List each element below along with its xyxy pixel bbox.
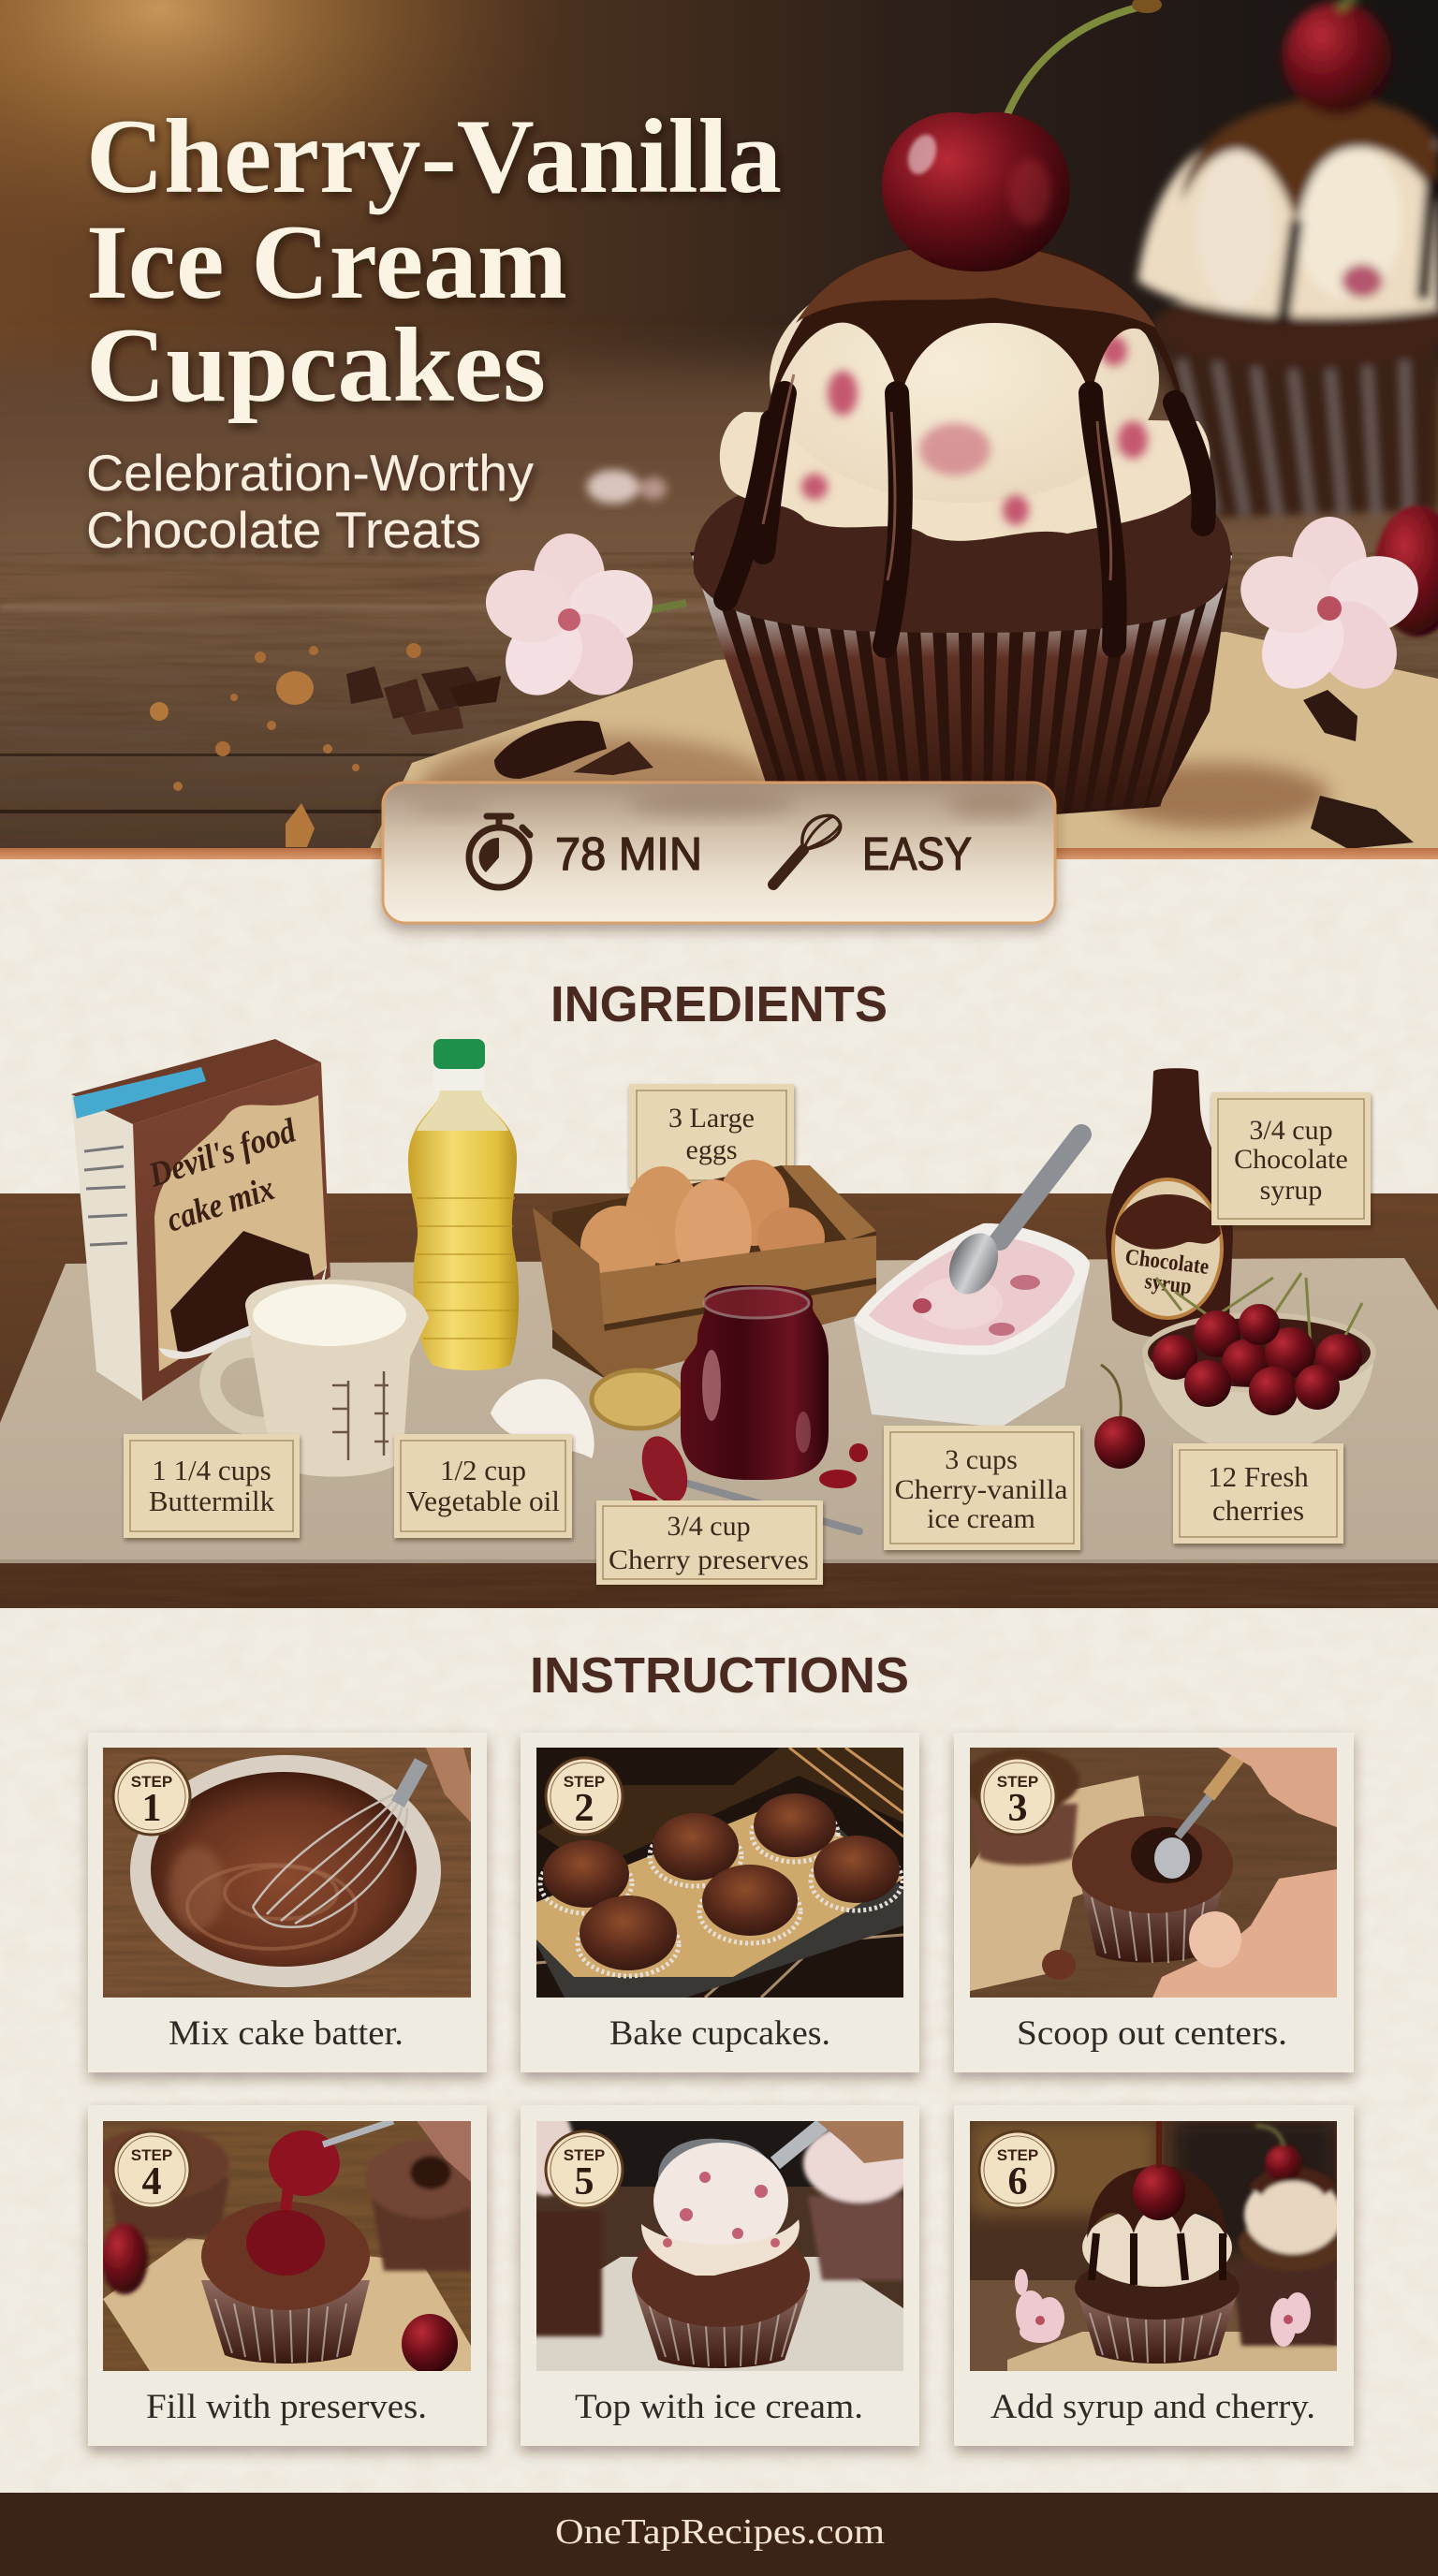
cherry preserves tag [596,1500,823,1585]
hero subtitle: Chocolate Treats [86,501,481,559]
parchment sheet [370,632,1438,849]
icon: stopwatch [469,816,530,887]
step 4 caption: Fill with preserves. [146,2388,427,2426]
hero title [86,98,782,424]
blossom left [477,534,686,710]
card paper [88,2105,487,2446]
ice cream tag: 3 cups [945,1444,1018,1475]
step 6 badge: STEP [997,2146,1038,2164]
chocolate syrup bottle: Chocolate [1123,1245,1211,1280]
hero title: Ice Cream [86,204,567,321]
step 2 badge [546,1758,623,1835]
card paper [954,2105,1354,2446]
chocolate syrup tag: syrup [1260,1175,1322,1206]
chocolate syrup bottle: syrup [1143,1269,1193,1299]
photo: topping with ice cream [536,2121,903,2371]
step 1 caption: Mix cake batter. [169,2014,404,2053]
bowl of cherries [1143,1273,1374,1454]
step 5 badge: STEP [564,2146,605,2164]
step 5 caption: Top with ice cream. [575,2388,863,2426]
ingredients heading: INGREDIENTS [550,976,888,1032]
hero panel [0,0,1438,927]
cherry preserves tag: Cherry preserves [609,1544,809,1575]
ingredients table scene [0,1039,1438,1608]
cupcake wrapper [690,552,1232,816]
step 6 caption: Add syrup and cherry. [990,2388,1315,2426]
step 6 card [954,2105,1354,2446]
cake mix box [71,1039,330,1401]
difficulty label: EASY [862,829,972,880]
linen cloth [0,1258,1438,1563]
time and difficulty badge [383,783,1055,923]
oil bottle [408,1039,519,1370]
step 4 card [88,2105,487,2446]
time label: 78 MIN [555,829,702,880]
blossom right [1230,517,1429,705]
jar of cherry preserves [681,1285,829,1480]
wooden table [0,1193,1438,1608]
step 5 badge: 5 [575,2160,594,2203]
small blurred blossom [587,470,667,504]
photo: filling with preserves [103,2121,471,2371]
ice cream ruffle [720,412,1210,541]
step 6 badge: 6 [1007,2160,1028,2203]
cake mix box: cake mix [162,1169,279,1240]
step 2 badge: 2 [575,1787,594,1830]
accent stripe [0,848,1438,859]
step 3 caption: Scoop out centers. [1017,2014,1287,2053]
step 4 badge: 4 [142,2160,161,2203]
footer [0,2493,1438,2576]
photo: scooping centers [970,1748,1337,1998]
jar lid [592,1370,685,1428]
hero title: Cupcakes [86,307,546,424]
card paper [954,1733,1354,2072]
step 1 badge [113,1758,190,1835]
egg crate [533,1160,876,1381]
hero backdrop [0,0,1438,848]
eggs tag: eggs [685,1134,738,1165]
hero title: Cherry-Vanilla [86,98,782,215]
preserves spoon [629,1430,859,1531]
step 4 badge [113,2131,190,2208]
cherry preserves tag: 3/4 cup [667,1511,751,1542]
butter [491,1379,594,1458]
fresh cherries tag: cherries [1212,1494,1304,1527]
icon: whisk [773,815,841,885]
photo: baking in oven [536,1748,903,1998]
instructions heading: INSTRUCTIONS [530,1647,909,1704]
page paper background [0,842,1438,2499]
step 3 badge [979,1758,1056,1835]
eggs tag: 3 Large [668,1103,755,1134]
photo: finished cupcake [970,2121,1337,2371]
chocolate syrup tag [1211,1092,1371,1225]
step 2 caption: Bake cupcakes. [609,2014,830,2053]
step 3 card [954,1733,1354,2072]
footer website text: OneTapRecipes.com [555,2512,885,2552]
cake mix box: Devil's food [143,1111,301,1195]
step 4 badge: STEP [131,2146,172,2164]
step 3 badge: STEP [997,1773,1038,1791]
chocolate shavings and crumbs [150,643,1414,849]
buttermilk tag [124,1434,300,1538]
cherry swirls in ice cream [801,336,1148,525]
ice cream tag: ice cream [927,1503,1035,1534]
card paper [521,2105,919,2446]
hero subtitle [86,444,534,559]
step 6 badge [979,2131,1056,2208]
silver scoop [940,1134,1081,1302]
hero subtitle: Celebration-Worthy [86,444,534,502]
step 1 card [88,1733,487,2072]
photo: mixing batter [103,1748,471,1998]
red cherry at right edge [1374,505,1438,637]
step 5 badge [546,2131,623,2208]
jam drips [819,1443,868,1488]
card paper [521,1733,919,2072]
vegetable oil tag: Vegetable oil [406,1485,560,1517]
ice cream tub [854,1223,1090,1427]
chocolate syrup cap and drips [726,242,1204,646]
step 1 badge: STEP [131,1773,172,1791]
step 5 card [518,2102,919,2446]
eggs tag [629,1084,794,1187]
main cupcake [690,0,1232,816]
step 2 badge: STEP [564,1773,605,1791]
fresh cherries tag: 12 Fresh [1208,1460,1309,1493]
ice cream tag [884,1426,1080,1550]
vegetable oil tag: 1/2 cup [440,1454,526,1486]
card paper [88,1733,487,2072]
chocolate syrup bottle [1106,1068,1233,1339]
chocolate syrup tag: Chocolate [1234,1144,1348,1175]
vegetable oil tag [394,1434,572,1538]
loose cherry [1094,1365,1145,1469]
buttermilk tag: 1 1/4 cups [152,1454,271,1486]
step 3 badge: 3 [1007,1787,1028,1830]
ice cream tag: Cherry-vanilla [895,1474,1067,1505]
step 2 card [521,1733,919,2072]
cupcake cake dome [694,476,1231,633]
buttermilk tag: Buttermilk [149,1485,275,1517]
chocolate syrup tag: 3/4 cup [1249,1115,1333,1146]
measuring cup of buttermilk [210,1280,429,1477]
blurred background cupcake [1137,0,1438,518]
ice cream scoop [770,256,1159,503]
fresh cherries tag [1173,1443,1343,1544]
cherry on top [882,0,1162,271]
step 1 badge: 1 [142,1787,161,1830]
